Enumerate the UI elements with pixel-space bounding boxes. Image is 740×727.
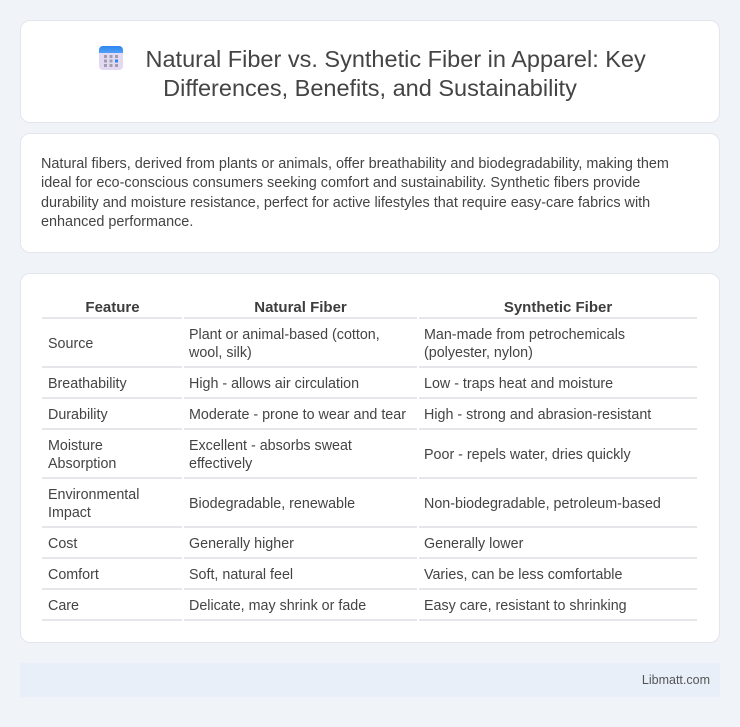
row: breathability: High - allows air circulation xyxy=(189,376,359,392)
title: Natural Fiber vs. Synthetic Fiber in Apparel: Key xyxy=(146,46,646,72)
row: environmental impact: Biodegradable, renewable xyxy=(189,496,355,512)
row: care: Delicate, may shrink or fade xyxy=(189,598,366,614)
title xyxy=(146,46,646,101)
row: environmental impact xyxy=(48,487,661,521)
footer credit: Libmatt.com xyxy=(642,673,710,687)
row: source: Plant or animal-based (cotton, xyxy=(189,327,380,343)
row: moisture absorption: Absorption xyxy=(48,456,116,472)
row: environmental impact: Non-biodegradable, petroleum-based xyxy=(424,496,661,512)
row: environmental impact: Impact xyxy=(48,505,91,521)
intro text: enhanced performance. xyxy=(41,214,193,230)
title: Differences, Benefits, and Sustainability xyxy=(163,75,577,101)
row: source: (polyester, nylon) xyxy=(424,345,533,361)
row: durability: Moderate - prone to wear and tear xyxy=(189,407,406,423)
row: care: Care xyxy=(48,598,79,614)
table header: Feature xyxy=(85,299,140,316)
intro text xyxy=(41,156,669,230)
row: source: wool, silk) xyxy=(189,345,252,361)
row: moisture absorption: Excellent - absorbs sweat xyxy=(189,438,352,454)
table header: Natural Fiber xyxy=(254,299,347,316)
row: care: Easy care, resistant to shrinking xyxy=(424,598,627,614)
row: durability: High - strong and abrasion-resistant xyxy=(424,407,651,423)
row: moisture absorption xyxy=(48,438,631,472)
row: cost: Generally higher xyxy=(189,536,294,552)
footer bar xyxy=(20,663,720,697)
row: cost: Cost xyxy=(48,536,77,552)
table card xyxy=(20,273,720,643)
row: moisture absorption: Poor - repels water, dries quickly xyxy=(424,447,631,463)
row: comfort: Soft, natural feel xyxy=(189,567,293,583)
row: breathability: Breathability xyxy=(48,376,127,392)
row: durability: Durability xyxy=(48,407,108,423)
row: cost xyxy=(48,536,524,552)
row: source: Source xyxy=(48,336,93,352)
intro text: ideal for eco-conscious consumers seeking comfort and sustainability. Synthetic fibers provide xyxy=(41,175,640,191)
row: durability xyxy=(48,407,652,423)
intro text: Natural fibers, derived from plants or animals, offer breathability and biodegradability, making them xyxy=(41,156,669,172)
row: environmental impact: Environmental xyxy=(48,487,139,503)
icon: calendar grid xyxy=(99,46,123,70)
row: moisture absorption: Moisture xyxy=(48,438,103,454)
row: moisture absorption: effectively xyxy=(189,456,252,472)
intro text: durability and moisture resistance, perfect for active lifestyles that require easy-care fabrics with xyxy=(41,195,650,211)
title card xyxy=(20,20,720,123)
row: breathability xyxy=(48,376,613,392)
row: comfort: Comfort xyxy=(48,567,99,583)
intro card xyxy=(20,133,720,253)
row: comfort: Varies, can be less comfortable xyxy=(424,567,622,583)
row: care xyxy=(48,598,627,614)
row: source: Man-made from petrochemicals xyxy=(424,327,625,343)
row: comfort xyxy=(48,567,622,583)
table header: Synthetic Fiber xyxy=(504,299,612,316)
table header xyxy=(85,299,612,316)
row: cost: Generally lower xyxy=(424,536,523,552)
row: breathability: Low - traps heat and moisture xyxy=(424,376,613,392)
row: source xyxy=(48,327,625,361)
